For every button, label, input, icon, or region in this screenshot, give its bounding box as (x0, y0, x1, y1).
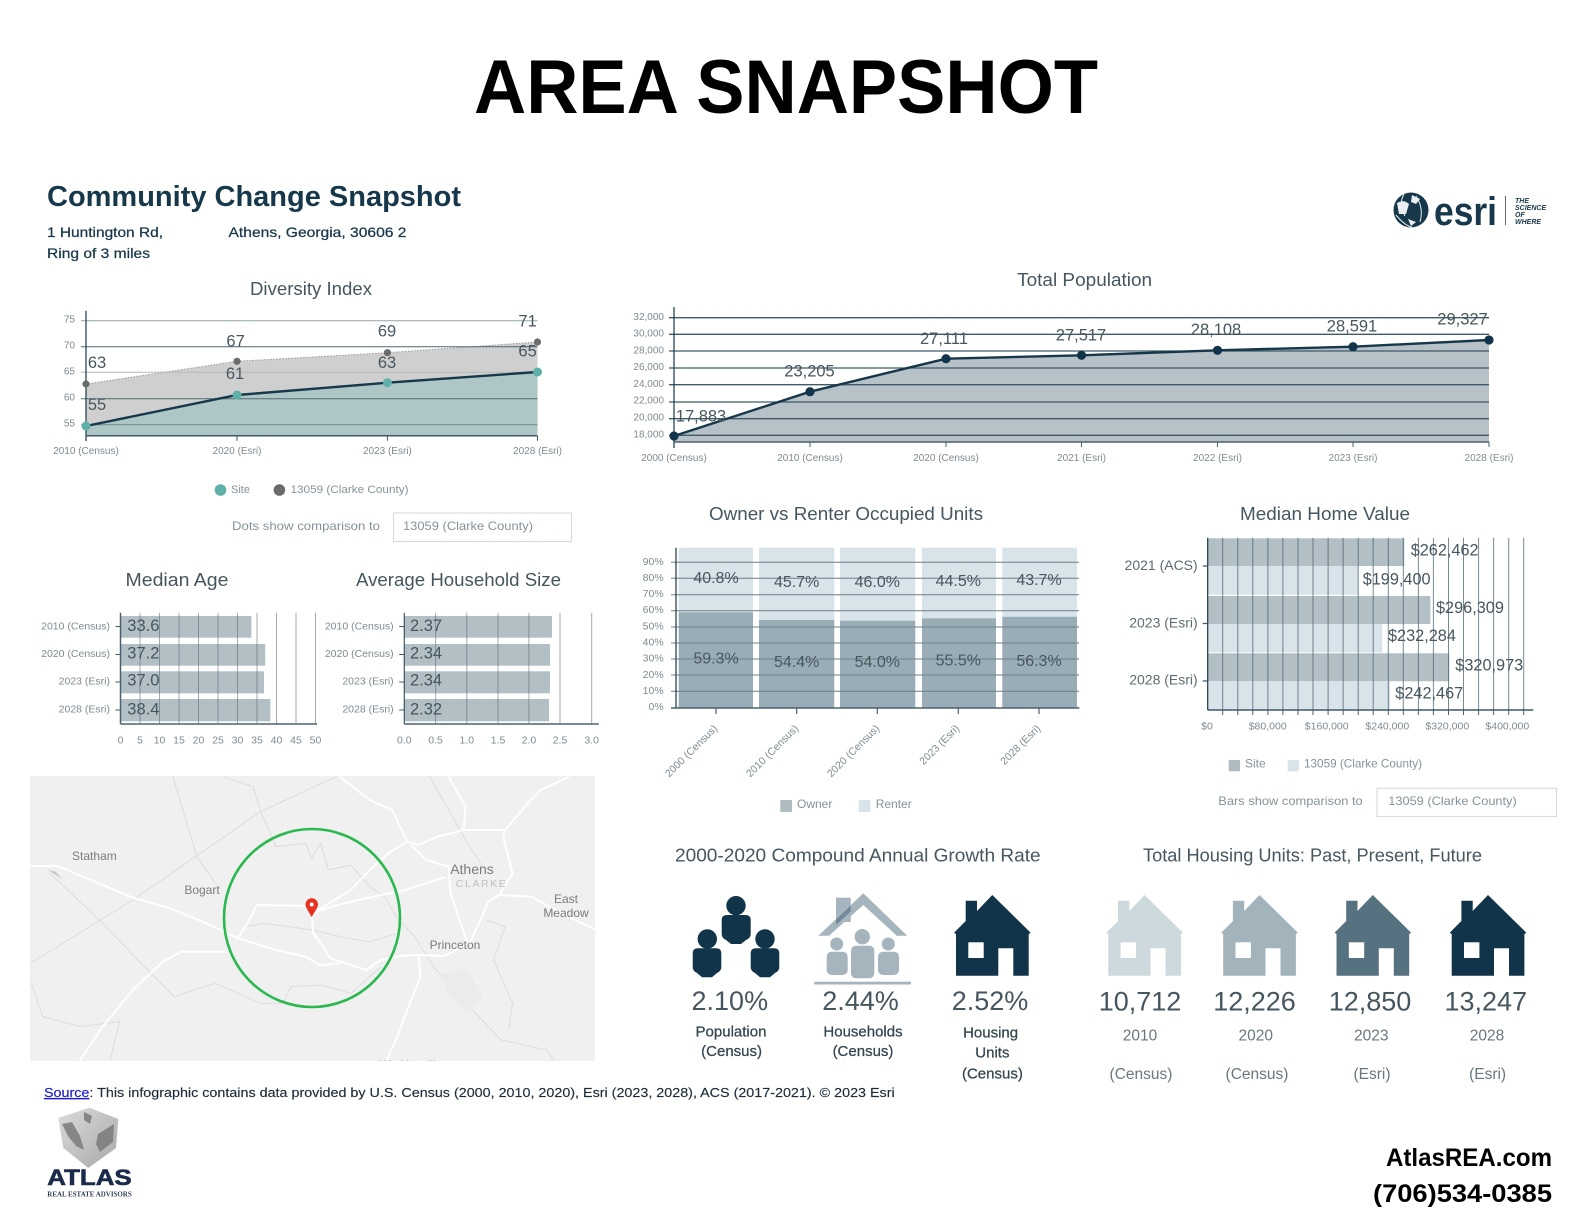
comparison selector: dots: 13059 (Clarke County) (403, 519, 533, 533)
contact details: AtlasREA.com (1386, 1144, 1552, 1172)
chart: total population: 26,000 (633, 362, 664, 373)
chart: owner vs renter occupied units: 70% (643, 588, 664, 600)
chart: median age: 2010 (Census) (41, 620, 110, 632)
housing unit years and sources: (Census) (1110, 1066, 1172, 1083)
chart: owner vs renter occupied units: Owner vs Renter Occupied Units (709, 504, 983, 524)
comparison selector: bars (1218, 788, 1556, 816)
esri logo: WHERE (1515, 219, 1541, 226)
legend: diversity index (215, 484, 408, 496)
chart: total population: 22,000 (633, 396, 664, 406)
chart: total population: 2010 (Census) (777, 453, 843, 464)
chart: total population: 2000 (Census) (641, 453, 707, 464)
chart: diversity index: 65 (518, 343, 537, 361)
chart: total population: 17,883 (676, 408, 726, 426)
chart: owner vs renter occupied units: 40% (643, 636, 664, 648)
contact details (1373, 1144, 1552, 1208)
chart: owner vs renter occupied units: 40.8% (693, 570, 739, 587)
esri logo: esri (1434, 190, 1497, 234)
chart: diversity index: Diversity Index (250, 279, 372, 299)
housing unit years and sources: 2020 (1238, 1028, 1273, 1045)
chart: median home value: 2028 (Esri) (1129, 671, 1198, 687)
chart: owner vs renter occupied units: 46.0% (855, 574, 900, 591)
chart: median home value: $232,284 (1388, 627, 1456, 645)
source note: Source : This infographic contains data provided by U.S. Census (2000, 2010, 2020), Esri (2023, 2028), ACS (2017-2021). © 2023 Esri (44, 1085, 895, 1100)
header: community change snapshot: 1 Huntington Rd, (47, 224, 163, 240)
comparison selector: bars: Bars show comparison to (1218, 794, 1363, 808)
chart: median home value: $262,462 (1411, 542, 1479, 560)
growth rates: 2.44% (822, 986, 899, 1016)
chart: total population: 27,517 (1056, 327, 1106, 345)
housing unit years and sources: (Esri) (1469, 1066, 1506, 1083)
chart: median age: 37.0 (127, 672, 159, 690)
chart: median home value: $0 (1201, 721, 1213, 733)
chart: diversity index: 63 (378, 354, 396, 372)
chart: diversity index: 2010 (Census) (53, 446, 119, 457)
atlas logo: ATLAS (47, 1165, 132, 1190)
chart: average household size (325, 569, 599, 747)
chart: diversity index: 2028 (Esri) (513, 446, 562, 457)
icon: house 2023 (1334, 895, 1411, 976)
chart: diversity index: 61 (226, 365, 244, 383)
housing unit years and sources: (Census) (1226, 1066, 1288, 1083)
chart: total population: 28,591 (1327, 318, 1377, 336)
chart: total population: 28,000 (633, 346, 664, 356)
esri logo: SCIENCE (1515, 205, 1546, 212)
housing unit counts: 12,226 (1213, 987, 1296, 1017)
growth rates: 2.10% (692, 986, 768, 1016)
chart: owner vs renter occupied units: 90% (643, 556, 664, 568)
chart: median home value: $320,973 (1455, 657, 1523, 675)
growth rate labels (696, 1024, 1023, 1082)
esri logo (1394, 190, 1546, 234)
chart: median home value: Median Home Value (1240, 504, 1410, 524)
chart: owner vs renter occupied units: 54.4% (774, 654, 819, 671)
chart: total population: 27,111 (920, 330, 968, 348)
chart: owner vs renter occupied units: 10% (643, 685, 664, 697)
growth rate labels: (Census) (962, 1065, 1023, 1082)
chart: median age (41, 569, 321, 747)
chart: total population: 30,000 (633, 328, 664, 340)
chart: median home value: $160,000 (1305, 721, 1349, 733)
header: community change snapshot: Ring of 3 miles (47, 245, 150, 261)
chart: total population: 2020 (Census) (913, 453, 979, 464)
map: 3-mile ring: Meadow (543, 906, 589, 920)
chart: owner vs renter occupied units: 55.5% (936, 652, 981, 670)
chart: median home value: 2023 (Esri) (1129, 615, 1198, 631)
chart: average household size: 2.34 (410, 672, 442, 690)
comparison selector: bars: 13059 (Clarke County) (1388, 794, 1517, 808)
legend: owner / renter: Owner (797, 797, 832, 811)
chart: total population: 2023 (Esri) (1329, 453, 1377, 464)
chart: diversity index (53, 279, 562, 457)
chart: average household size: 2020 (Census) (325, 648, 394, 660)
comparison selector: dots: Dots show comparison to (232, 519, 380, 533)
legend: diversity index: 13059 (Clarke County) (290, 484, 408, 496)
esri logo: OF (1515, 212, 1525, 219)
growth rates: 2.52% (952, 986, 1028, 1016)
chart: median age: 37.2 (127, 644, 159, 662)
chart: total population: 2021 (Esri) (1057, 453, 1106, 464)
growth rate labels: Households (823, 1024, 903, 1041)
chart: owner vs renter occupied units: 43.7% (1016, 572, 1062, 589)
chart: median age: 15 (173, 735, 185, 747)
chart: median home value: $296,309 (1436, 599, 1504, 617)
chart: total population: 32,000 (633, 312, 664, 323)
chart: diversity index: 69 (378, 323, 396, 341)
chart: total population: 24,000 (633, 379, 664, 390)
chart: diversity index: 60 (64, 392, 75, 404)
map: 3-mile ring: East (554, 892, 579, 906)
chart: diversity index: 71 (518, 313, 537, 331)
chart: median home value: $199,400 (1363, 570, 1431, 588)
chart: median age: 2020 (Census) (41, 648, 110, 660)
chart: diversity index: 63 (88, 354, 106, 372)
chart: total population: 23,205 (784, 363, 835, 381)
header: community change snapshot (47, 181, 461, 261)
chart: diversity index: 2023 (Esri) (363, 446, 412, 457)
growth rates (692, 986, 1028, 1016)
chart: average household size: 2.34 (410, 644, 442, 662)
chart: median age: 20 (193, 735, 204, 747)
growth rate labels: Housing (963, 1024, 1018, 1041)
chart: average household size: 2023 (Esri) (342, 676, 394, 688)
chart: total population: 28,108 (1191, 321, 1241, 339)
chart: owner vs renter occupied units: 20% (643, 669, 664, 681)
map: 3-mile ring: Athens (450, 861, 494, 877)
map: 3-mile ring: CLARKE (456, 878, 507, 890)
chart: median age: 2023 (Esri) (59, 676, 110, 688)
chart: median age: 10 (154, 735, 165, 747)
chart: average household size: Average Household Size (356, 569, 561, 590)
chart: owner vs renter occupied units: 2028 (Esri) (998, 723, 1043, 767)
comparison selector: dots (232, 513, 572, 542)
chart: diversity index: 65 (64, 366, 75, 378)
chart: owner vs renter occupied units: 56.3% (1016, 653, 1062, 670)
chart: total population: 20,000 (633, 412, 664, 424)
housing unit years and sources: 2010 (1123, 1028, 1158, 1045)
chart: owner vs renter occupied units: 2000 (Census) (663, 723, 720, 780)
housing unit years and sources: 2028 (1470, 1028, 1504, 1045)
legend: owner / renter: Renter (876, 797, 912, 811)
chart: median home value: $80,000 (1249, 721, 1287, 733)
chart: average household size: 2010 (Census) (325, 620, 394, 632)
chart: total population: 29,327 (1437, 310, 1488, 328)
icon: population (693, 896, 779, 977)
heading: compound annual growth rate: 2000-2020 Compound Annual Growth Rate (675, 846, 1041, 866)
chart: median home value: $400,000 (1485, 721, 1529, 733)
chart: average household size: 0.0 (397, 735, 412, 747)
chart: median age: Median Age (126, 569, 228, 590)
housing unit counts: 10,712 (1099, 987, 1181, 1017)
chart: average household size: 0.5 (428, 735, 443, 747)
chart: median age: 30 (232, 735, 243, 747)
chart: median age: 45 (290, 735, 302, 747)
growth rate labels: Units (975, 1045, 1009, 1062)
housing unit years and sources: 2023 (1354, 1028, 1389, 1045)
icon: house 2020 (1221, 895, 1298, 976)
contact details: (706)534-0385 (1373, 1180, 1552, 1208)
chart: diversity index: 67 (226, 333, 245, 351)
legend: diversity index: Site (231, 484, 250, 496)
atlas logo: REAL ESTATE ADVISORS (47, 1191, 132, 1199)
chart: median age: 40 (271, 735, 282, 747)
header: community change snapshot: Athens, Georgia, 30606 2 (228, 224, 407, 240)
legend: median home value: 13059 (Clarke County) (1304, 756, 1422, 770)
chart: average household size: 2.37 (410, 617, 442, 635)
chart: owner vs renter occupied units: 54.0% (855, 654, 900, 671)
chart: average household size: 2.5 (553, 735, 567, 747)
chart: owner vs renter occupied units: 80% (643, 572, 664, 584)
chart: owner vs renter occupied units: 60% (643, 604, 664, 616)
legend: owner / renter (780, 797, 912, 812)
chart: owner vs renter occupied units: 0% (649, 701, 664, 713)
map: 3-mile ring: Princeton (430, 938, 480, 952)
legend: median home value: Site (1245, 756, 1266, 770)
growth rate labels: Population (696, 1024, 766, 1041)
chart: total population: 18,000 (633, 430, 664, 440)
chart: owner vs renter occupied units: 2020 (Census) (825, 723, 882, 780)
chart: average household size: 1.0 (459, 735, 474, 747)
chart: average household size: 2.0 (522, 735, 536, 747)
housing unit years and sources (1110, 1028, 1506, 1083)
chart: diversity index: 75 (64, 314, 75, 326)
chart: median age: 0 (118, 735, 124, 747)
heading: total housing units: Total Housing Units: Past, Present, Future (1143, 846, 1482, 866)
housing unit counts: 13,247 (1445, 987, 1527, 1017)
icon: house 2010 (1106, 895, 1183, 976)
housing unit years and sources: (Esri) (1353, 1066, 1391, 1083)
growth rate labels: (Census) (701, 1043, 762, 1060)
chart: median home value: $240,000 (1365, 721, 1409, 733)
chart: median age: 35 (251, 735, 263, 747)
atlas logo (47, 1108, 132, 1199)
chart: average household size: 1.5 (491, 735, 505, 747)
chart: median home value (1125, 504, 1533, 733)
chart: median age: 33.6 (127, 617, 159, 635)
chart: total population: 2022 (Esri) (1193, 453, 1242, 464)
title: AREA SNAPSHOT (474, 45, 1098, 130)
legend: median home value (1229, 756, 1422, 771)
growth rate labels: (Census) (833, 1043, 893, 1060)
chart: diversity index: 55 (88, 396, 106, 414)
housing unit counts: 12,850 (1329, 987, 1411, 1017)
icon: housing units (954, 895, 1031, 976)
chart: diversity index: 70 (64, 340, 75, 352)
map: 3-mile ring: Watkinsville (380, 1058, 443, 1072)
chart: diversity index: 2020 (Esri) (213, 446, 261, 457)
chart: owner vs renter occupied units: 2010 (Census) (744, 723, 801, 780)
chart: owner vs renter occupied units (643, 504, 1079, 780)
map: 3-mile ring: Statham (72, 849, 117, 863)
chart: median age: 25 (212, 735, 224, 747)
chart: owner vs renter occupied units: 2023 (Esri) (917, 723, 962, 767)
icon: house 2028 (1450, 895, 1526, 976)
esri logo: THE (1515, 198, 1529, 205)
chart: average household size: 2.32 (410, 700, 442, 718)
chart: average household size: 3.0 (584, 735, 599, 747)
map: 3-mile ring: Bogart (184, 883, 220, 897)
chart: total population (633, 270, 1513, 464)
chart: owner vs renter occupied units: 50% (643, 620, 664, 632)
chart: median age: 2028 (Esri) (59, 704, 110, 716)
chart: owner vs renter occupied units: 45.7% (774, 574, 819, 591)
chart: owner vs renter occupied units: 59.3% (693, 650, 739, 668)
map: 3-mile ring (30, 776, 595, 1072)
chart: owner vs renter occupied units: 44.5% (936, 573, 981, 590)
chart: median home value: $320,000 (1425, 721, 1469, 733)
chart: owner vs renter occupied units: 30% (643, 652, 664, 664)
chart: median age: 50 (310, 735, 321, 747)
header: community change snapshot: Community Change Snapshot (47, 181, 461, 213)
chart: diversity index: 55 (64, 418, 75, 430)
chart: median home value: 2021 (ACS) (1125, 557, 1198, 573)
chart: total population: 2028 (Esri) (1465, 453, 1513, 464)
chart: median home value: $242,467 (1395, 685, 1463, 703)
chart: average household size: 2028 (Esri) (342, 704, 394, 716)
chart: median age: 5 (137, 735, 143, 747)
chart: total population: Total Population (1017, 270, 1152, 290)
housing unit counts (1099, 987, 1527, 1017)
icon: households (814, 893, 911, 984)
chart: median age: 38.4 (127, 700, 159, 718)
